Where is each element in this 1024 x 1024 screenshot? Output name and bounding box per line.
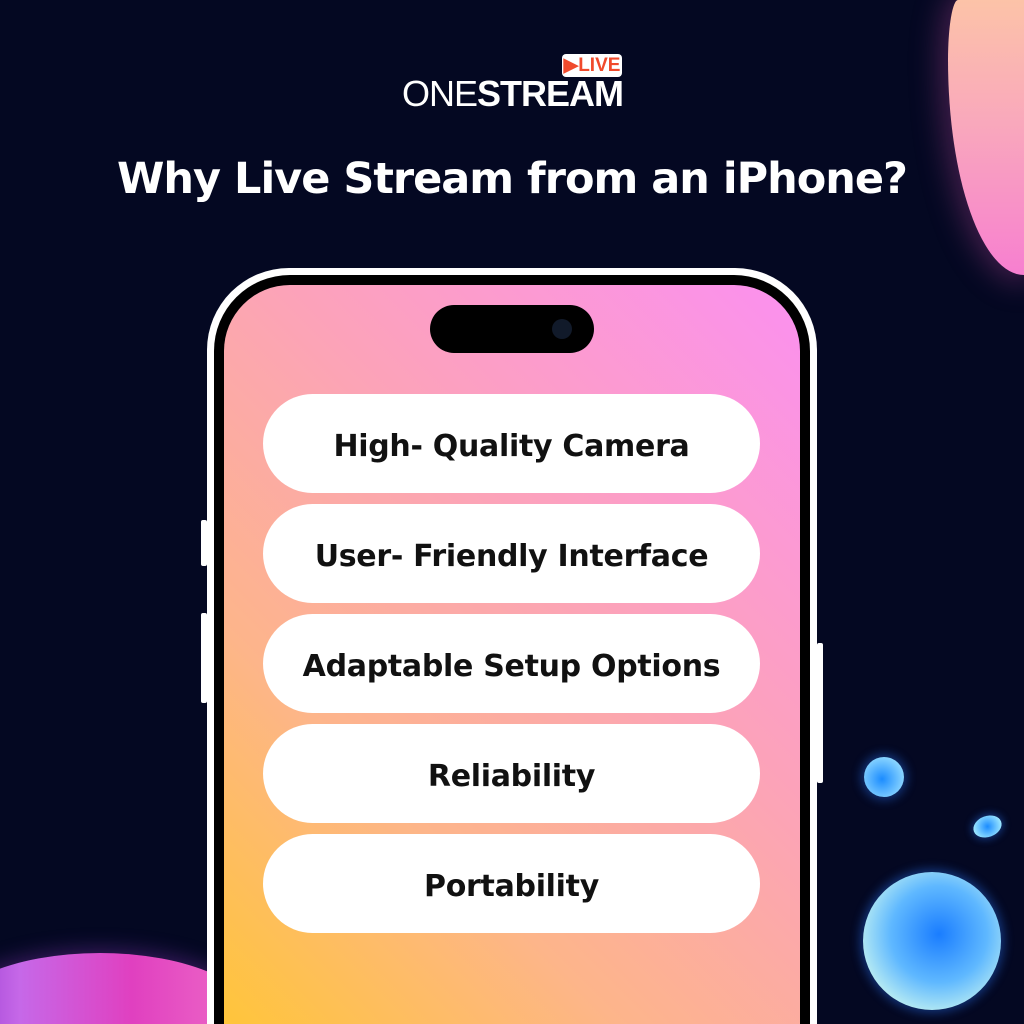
phone frame — [207, 268, 817, 1024]
pill: reliability: Reliability — [428, 759, 595, 794]
phone screen — [224, 285, 800, 1024]
logo: wordmark: ONESTREAM — [402, 73, 623, 114]
pill: camera — [263, 394, 760, 493]
bubble big — [863, 872, 1001, 1010]
blob: top right — [948, 0, 1024, 275]
phone side buttons — [201, 520, 207, 566]
pill: interface — [263, 504, 760, 603]
phone — [201, 268, 823, 1024]
pill: setup — [263, 614, 760, 713]
pill: portability: Portability — [424, 869, 599, 904]
pill: setup: Adaptable Setup Options — [303, 649, 720, 684]
blob: bottom left — [0, 953, 260, 1024]
dynamic island — [430, 305, 594, 353]
pill: interface: User- Friendly Interface — [315, 539, 708, 574]
bubble tiny — [970, 812, 1005, 841]
pill: portability — [263, 834, 760, 933]
logo: live badge: ▶LIVE — [564, 55, 620, 76]
bubble small — [864, 757, 904, 797]
logo — [402, 54, 623, 114]
title: Why Live Stream from an iPhone? — [117, 154, 907, 204]
pill: reliability — [263, 724, 760, 823]
pill: camera: High- Quality Camera — [333, 429, 690, 464]
